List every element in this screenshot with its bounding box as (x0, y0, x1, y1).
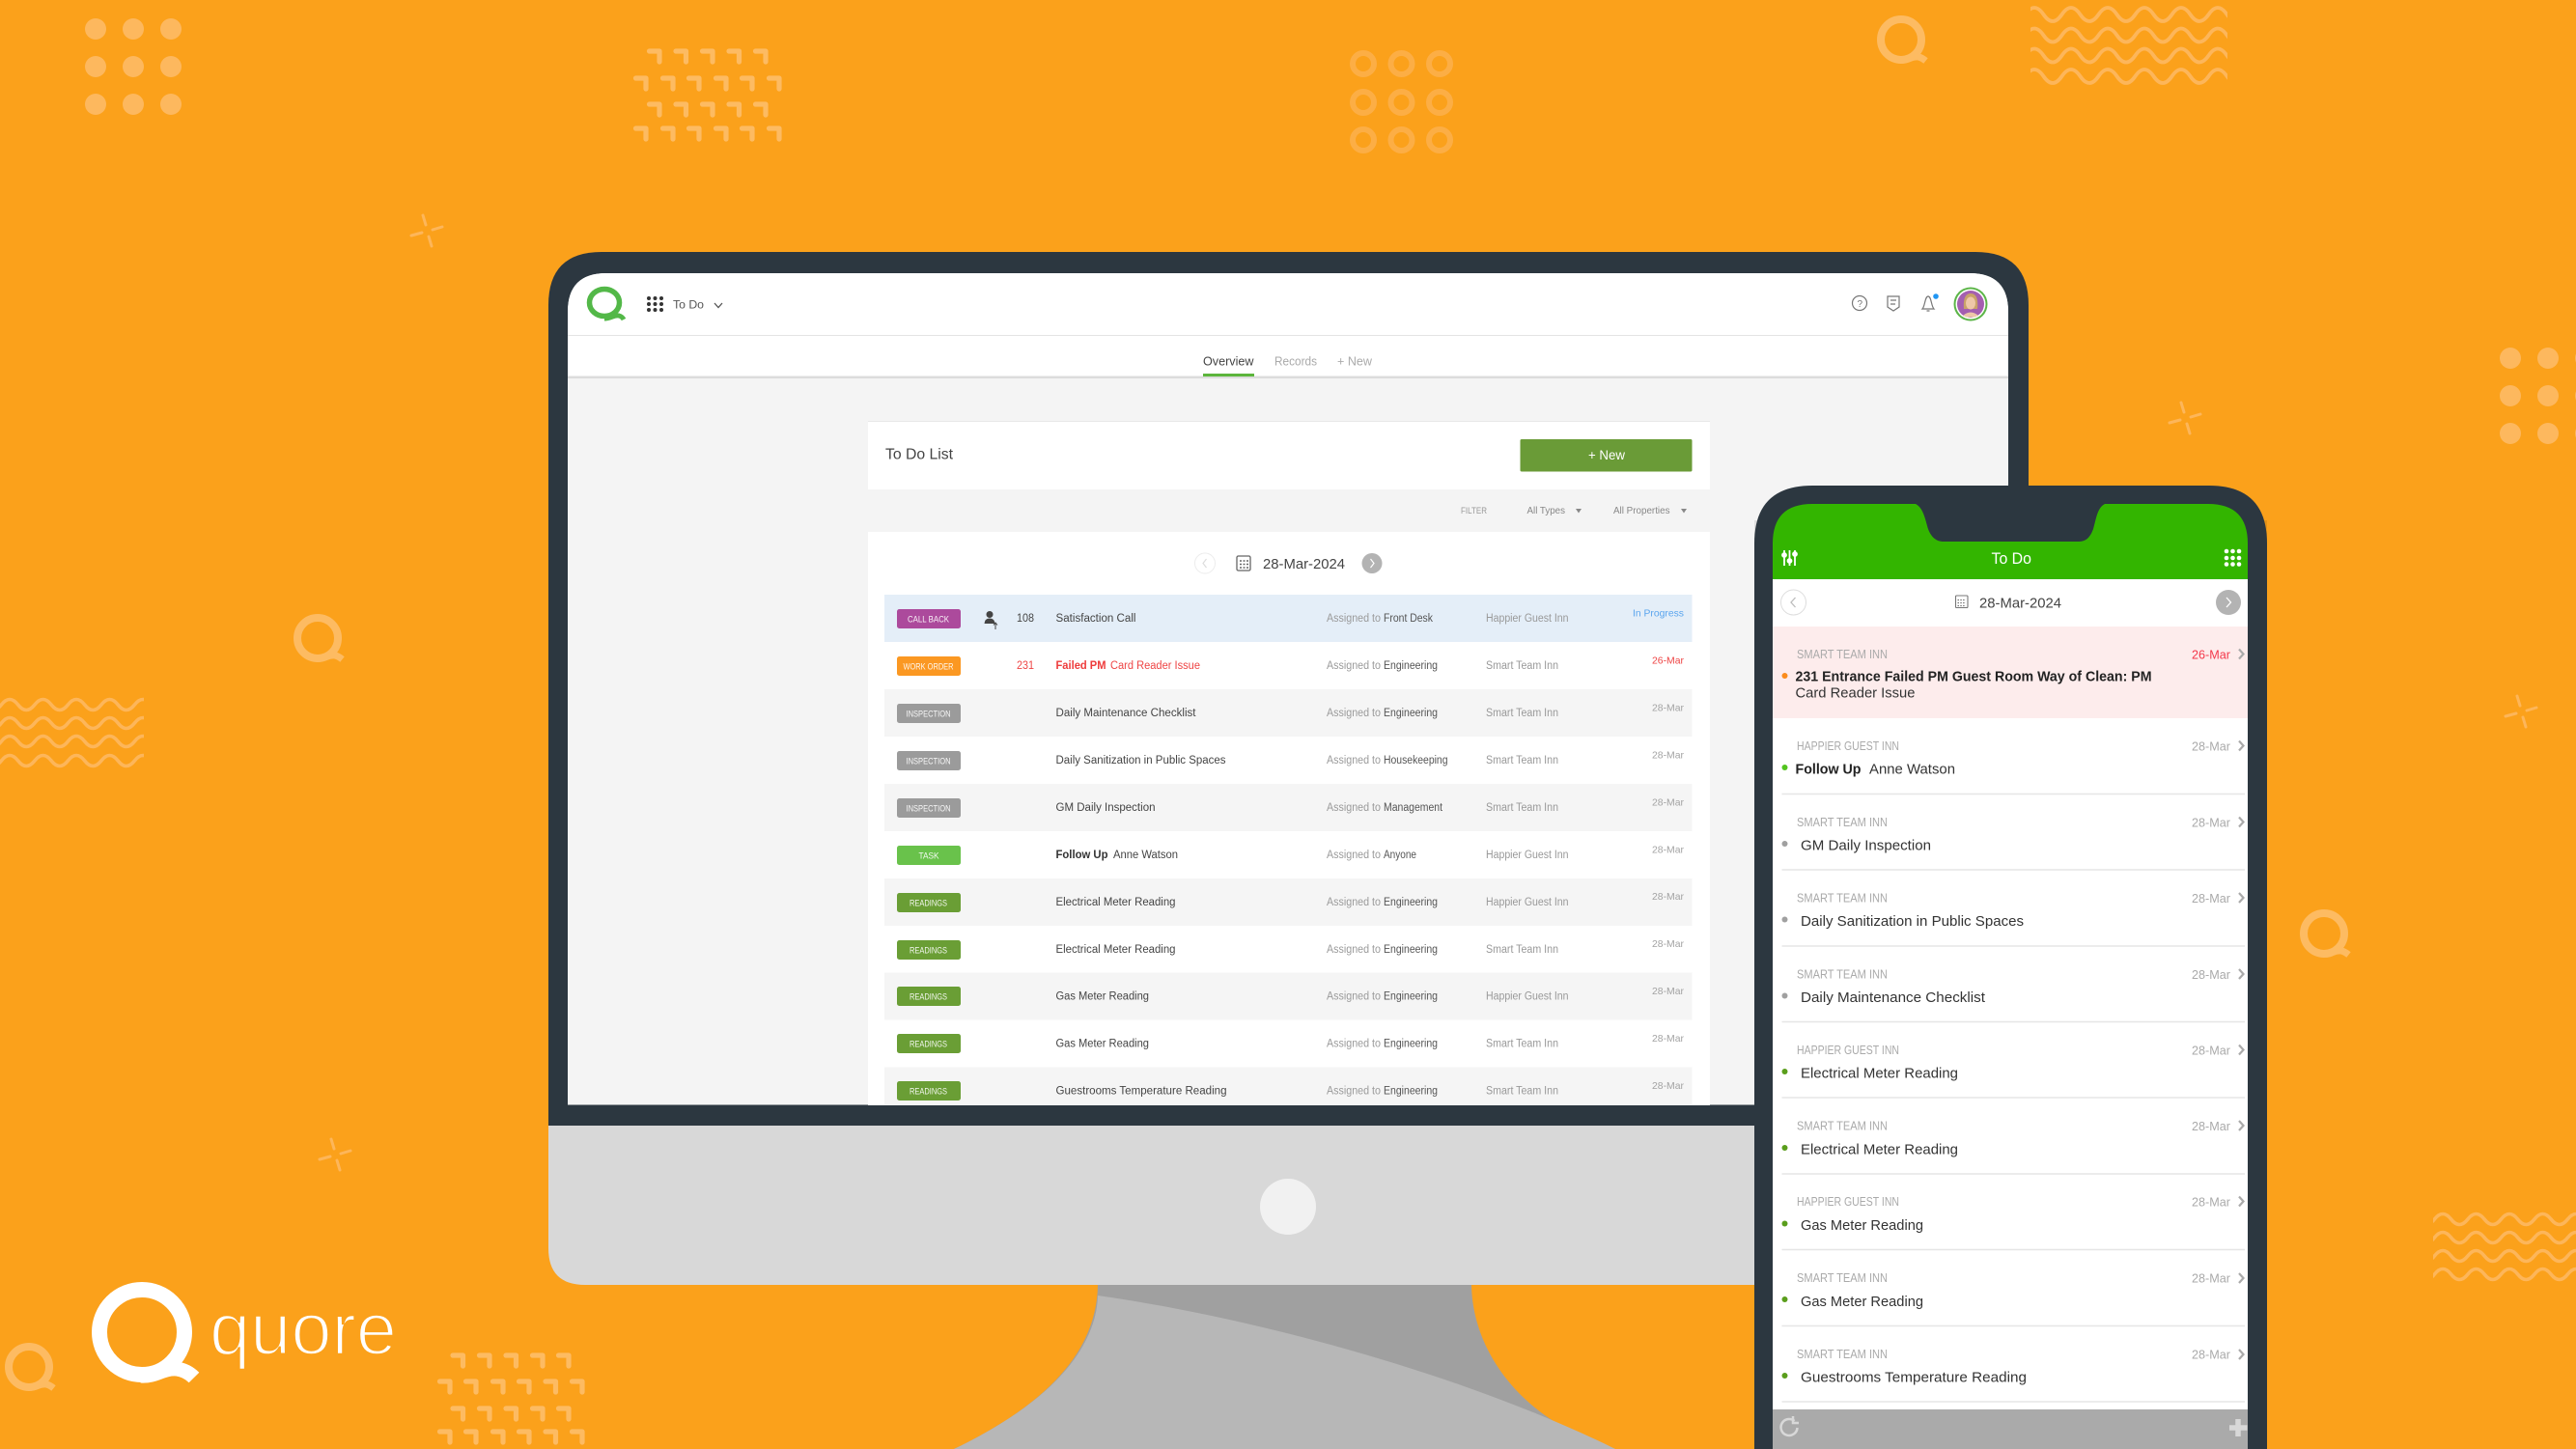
icon: menu chevron (714, 303, 722, 307)
row: Daily Maintenance Checklist (884, 689, 1692, 737)
phone screen (1773, 579, 2248, 1449)
row: Gas Meter Reading, Smart: Smart Team Inn (1486, 1039, 1558, 1050)
row: Electrical Meter Reading, Happier: Happier Guest Inn (1486, 897, 1568, 908)
filter bar: All Types (1527, 506, 1565, 516)
phone row: Electrical Meter, Smart (1782, 1120, 2245, 1174)
row: Daily Maintenance Checklist: INSPECTION (906, 709, 951, 720)
phone row: Follow Up: HAPPIER GUEST INN (1797, 739, 1899, 753)
row: Gas Meter Reading, Smart: Gas Meter Reading (1056, 1039, 1149, 1050)
new button: + New (1588, 448, 1625, 462)
icon: header Q logo (589, 290, 624, 320)
row: Follow Up Anne Watson: Anne Watson (1113, 850, 1178, 861)
icon: refresh (1781, 1416, 1799, 1435)
row: Daily Sanitization in Public Spaces: Housekeeping (1384, 755, 1448, 766)
icon: app grid (647, 296, 663, 312)
phone row: Guestrooms Temperature (1782, 1348, 2245, 1402)
phone row: Electrical Meter, Smart: 28-Mar (2192, 1120, 2230, 1133)
filter bar: All Properties (1613, 506, 1670, 516)
row: Gas Meter Reading, Happier: Engineering (1384, 990, 1438, 1002)
row: Satisfaction Call: Front Desk (1384, 613, 1433, 625)
phone row: Daily Sanitization: Daily Sanitization in Public Spaces (1801, 913, 2024, 930)
phone row: Gas Meter, Smart: SMART TEAM INN (1797, 1271, 1888, 1285)
phone row: GM Daily Inspection: SMART TEAM INN (1797, 816, 1888, 829)
icon: avatar (1954, 288, 1987, 320)
row: Guestrooms Temperature Reading: READINGS (910, 1087, 947, 1097)
row: Gas Meter Reading, Smart: 28-Mar (1652, 1033, 1684, 1045)
monitor stand (954, 1285, 1615, 1449)
phone row: Gas Meter, Happier (1782, 1195, 2245, 1249)
phone row: Electrical Meter, Happier: HAPPIER GUEST INN (1797, 1044, 1899, 1057)
phone row: Guestrooms Temperature: Guestrooms Temperature Reading (1801, 1369, 2027, 1386)
row: Electrical Meter Reading, Happier: 28-Mar (1652, 891, 1684, 903)
pattern: Q left (297, 618, 342, 659)
row: Satisfaction Call: Happier Guest Inn (1486, 613, 1568, 625)
row: Daily Sanitization in Public Spaces: 28-Mar (1652, 749, 1684, 761)
panel heading: To Do List (885, 446, 954, 463)
icon: filter sliders (1782, 550, 1797, 566)
row: GM Daily Inspection: Assigned to (1327, 802, 1381, 814)
tab: New: + New (1337, 355, 1373, 369)
app menu label: To Do (673, 297, 704, 311)
row: Guestrooms Temperature Reading: Smart Team Inn (1486, 1085, 1558, 1097)
row: Daily Sanitization in Public Spaces (897, 749, 1684, 770)
phone row: Daily Maintenance: SMART TEAM INN (1797, 967, 1888, 981)
phone row: Daily Maintenance: 28-Mar (2192, 968, 2230, 982)
phone title: To Do (1991, 549, 2031, 568)
row: Satisfaction Call: Assigned to (1327, 613, 1381, 625)
row: Gas Meter Reading, Happier: READINGS (910, 992, 947, 1002)
row: Satisfaction Call: In Progress (1633, 608, 1684, 620)
row: Daily Maintenance Checklist: Smart Team Inn (1486, 708, 1558, 719)
row: Failed PM Card Reader Issue: 231 (1017, 660, 1034, 672)
row: Follow Up Anne Watson: Assigned to (1327, 850, 1381, 861)
phone row: Guestrooms Temperature: SMART TEAM INN (1797, 1348, 1888, 1361)
phone row: GM Daily Inspection: 28-Mar (2192, 817, 2230, 830)
row: Electrical Meter Reading, Smart: Engineering (1384, 944, 1438, 956)
row: Electrical Meter Reading, Smart: Smart Team Inn (1486, 944, 1558, 956)
row: Failed PM Card Reader Issue: Engineering (1384, 660, 1438, 672)
phone row: Gas Meter, Smart: Gas Meter Reading (1801, 1294, 1923, 1310)
row: Electrical Meter Reading, Smart: Electrical Meter Reading (1056, 944, 1176, 956)
phone row: Entrance Failed PM: 26-Mar (2192, 649, 2230, 662)
phone row: Follow Up (1782, 739, 2245, 794)
row: Follow Up Anne Watson: 28-Mar (1652, 844, 1684, 855)
pattern: dots right (2500, 348, 2576, 444)
phone row: Electrical Meter, Smart: SMART TEAM INN (1797, 1120, 1888, 1133)
icon: bell (1922, 293, 1939, 311)
pattern: waves right (2418, 1214, 2576, 1280)
row: Electrical Meter Reading, Smart (897, 938, 1684, 960)
pattern: dots top left (85, 18, 182, 115)
row: Daily Maintenance Checklist: Assigned to (1327, 708, 1381, 719)
phone row: Entrance Failed PM: SMART TEAM INN (1797, 648, 1888, 661)
phone row: Gas Meter, Happier: HAPPIER GUEST INN (1797, 1195, 1899, 1209)
row: Gas Meter Reading, Smart: Engineering (1384, 1039, 1438, 1050)
row: Daily Sanitization in Public Spaces: INSPECTION (906, 757, 951, 766)
row: Daily Sanitization in Public Spaces: Assigned to (1327, 755, 1381, 766)
row: Failed PM Card Reader Issue: Failed PM (1056, 660, 1106, 672)
row: Follow Up Anne Watson: TASK (919, 851, 939, 861)
row: Gas Meter Reading, Smart: Assigned to (1327, 1039, 1381, 1050)
monitor chin (548, 1120, 2029, 1285)
row: Satisfaction Call: CALL BACK (908, 614, 950, 626)
row: GM Daily Inspection (884, 784, 1692, 831)
row: Daily Sanitization in Public Spaces: Smart Team Inn (1486, 755, 1558, 766)
app header (568, 273, 2008, 378)
panel: to do list (868, 421, 1710, 1105)
phone row: Gas Meter, Happier: Gas Meter Reading (1801, 1217, 1923, 1234)
row: Follow Up Anne Watson: Follow Up (1056, 850, 1108, 861)
row: Satisfaction Call: Satisfaction Call (1056, 613, 1135, 625)
row: Gas Meter Reading, Happier (884, 973, 1692, 1019)
phone row: Daily Sanitization (1782, 892, 2245, 946)
row: Satisfaction Call: 108 (1017, 613, 1034, 625)
phone row: Electrical Meter, Happier (1782, 1044, 2245, 1098)
icon: Q mark (99, 1290, 194, 1378)
pattern: sparkle top left (411, 215, 442, 246)
icon: comments (1888, 296, 1899, 311)
wordmark: quore (210, 1289, 397, 1371)
tab: Overview (1203, 355, 1254, 376)
row: Guestrooms Temperature Reading: Guestrooms Temperature Reading (1056, 1085, 1226, 1097)
row: Guestrooms Temperature Reading: Assigned to (1327, 1085, 1381, 1097)
row: Electrical Meter Reading, Happier: READINGS (910, 898, 947, 909)
phone row: Follow Up: Anne Watson (1869, 761, 1955, 778)
phone row: Electrical Meter, Happier: Electrical Meter Reading (1801, 1066, 1958, 1081)
phone row: Daily Maintenance: Daily Maintenance Checklist (1801, 989, 1986, 1006)
pattern: sparkle right lower (2506, 696, 2536, 727)
row: Gas Meter Reading, Happier: Assigned to (1327, 990, 1381, 1002)
phone row: Gas Meter, Smart (1782, 1271, 2245, 1326)
new button (1520, 439, 1692, 471)
row: Failed PM Card Reader Issue: Assigned to (1327, 660, 1381, 672)
row: Electrical Meter Reading, Happier: Engineering (1384, 897, 1438, 908)
row: GM Daily Inspection: Smart Team Inn (1486, 802, 1558, 814)
icon: plus (2229, 1419, 2248, 1436)
monitor bezel (548, 252, 2029, 1126)
row: Electrical Meter Reading, Smart: Assigned to (1327, 944, 1381, 956)
monitor button (1260, 1179, 1316, 1235)
icon: help (1852, 295, 1867, 311)
icon: phone grid (2225, 549, 2241, 567)
row: Gas Meter Reading, Smart (897, 1033, 1684, 1053)
row: Gas Meter Reading, Happier: Happier Guest Inn (1486, 990, 1568, 1002)
row: Electrical Meter Reading, Smart: READINGS (910, 946, 947, 956)
row: GM Daily Inspection: GM Daily Inspection (1056, 802, 1155, 814)
row: Follow Up Anne Watson (897, 844, 1684, 865)
row: Gas Meter Reading, Happier: Gas Meter Reading (1056, 990, 1149, 1002)
phone date navigator (1780, 590, 2241, 615)
pattern: rings top (1353, 53, 1450, 151)
logo: quore (99, 1289, 397, 1378)
row: Electrical Meter Reading, Smart: 28-Mar (1652, 938, 1684, 950)
row: Daily Maintenance Checklist: Daily Maintenance Checklist (1056, 708, 1196, 719)
row: Satisfaction Call (884, 595, 1692, 642)
phone row: Entrance Failed PM (1773, 627, 2248, 718)
row: Electrical Meter Reading, Happier: Assigned to (1327, 897, 1381, 908)
row: GM Daily Inspection: Management (1384, 802, 1443, 814)
phone row: Follow Up: Follow Up (1796, 761, 1862, 778)
phone row: Gas Meter, Happier: 28-Mar (2192, 1195, 2230, 1209)
phone bottom bar (1773, 1409, 2248, 1449)
row: Guestrooms Temperature Reading: 28-Mar (1652, 1080, 1684, 1092)
phone row: Entrance Failed PM: 231 Entrance Failed PM Guest Room Way of Clean: PM (1796, 668, 2151, 685)
pattern: ticks top (635, 51, 779, 139)
row: GM Daily Inspection: INSPECTION (906, 803, 951, 815)
row: Failed PM Card Reader Issue: WORK ORDER (904, 662, 954, 672)
row: Gas Meter Reading, Smart: READINGS (910, 1039, 947, 1050)
row: Gas Meter Reading, Happier: 28-Mar (1652, 986, 1684, 997)
phone row: Daily Sanitization: 28-Mar (2192, 892, 2230, 906)
row: Failed PM Card Reader Issue: Smart Team Inn (1486, 660, 1558, 672)
row: Follow Up Anne Watson: Happier Guest Inn (1486, 850, 1568, 861)
filter bar (868, 489, 1710, 532)
pattern: ticks bottom left (440, 1355, 582, 1442)
date navigator: 28-Mar-2024 (1263, 556, 1345, 572)
pattern: sparkle left lower (320, 1139, 350, 1170)
phone row: Daily Sanitization: SMART TEAM INN (1797, 892, 1888, 906)
monitor screen (568, 273, 2008, 1105)
pattern: Q top right (1881, 19, 1925, 61)
phone row: Gas Meter, Smart: 28-Mar (2192, 1272, 2230, 1286)
pattern: Q bottom left (9, 1347, 54, 1388)
phone row: GM Daily Inspection (1782, 816, 2245, 870)
tab: Overview: Overview (1203, 355, 1254, 369)
phone row: Electrical Meter, Happier: 28-Mar (2192, 1045, 2230, 1058)
phone body (1754, 486, 2267, 1449)
row: Failed PM Card Reader Issue (897, 655, 1684, 676)
row: Guestrooms Temperature Reading (884, 1068, 1692, 1104)
row: Daily Sanitization in Public Spaces: Daily Sanitization in Public Spaces (1056, 755, 1226, 766)
row: Follow Up Anne Watson: Anyone (1384, 850, 1416, 861)
phone row: Follow Up: 28-Mar (2192, 739, 2230, 753)
row: Daily Maintenance Checklist: 28-Mar (1652, 703, 1684, 714)
row: Failed PM Card Reader Issue: 26-Mar (1652, 655, 1684, 666)
row: GM Daily Inspection: 28-Mar (1652, 797, 1684, 809)
row: Daily Maintenance Checklist: Engineering (1384, 708, 1438, 719)
tab: Records: Records (1274, 355, 1317, 369)
pattern: waves top right (2030, 6, 2227, 85)
phone row: Electrical Meter, Smart: Electrical Meter Reading (1801, 1141, 1958, 1158)
phone row: Entrance Failed PM: Card Reader Issue (1796, 685, 1916, 701)
date navigator (1195, 553, 1383, 573)
phone row: GM Daily Inspection: GM Daily Inspection (1801, 838, 1931, 853)
pattern: Q right (2304, 913, 2348, 955)
pattern: waves left (0, 699, 168, 766)
row: Guestrooms Temperature Reading: Engineering (1384, 1085, 1438, 1097)
pattern: sparkle right upper (2170, 403, 2200, 433)
icon: help: ? (1858, 299, 1863, 310)
row: Electrical Meter Reading, Happier (884, 878, 1692, 926)
filter bar: FILTER (1461, 506, 1487, 516)
phone (1754, 486, 2267, 1449)
row: Failed PM Card Reader Issue: Card Reader Issue (1110, 660, 1200, 672)
row: Electrical Meter Reading, Happier: Electrical Meter Reading (1056, 897, 1176, 908)
phone date navigator: 28-Mar-2024 (1979, 595, 2061, 612)
phone row: Guestrooms Temperature: 28-Mar (2192, 1348, 2230, 1361)
phone row: Daily Maintenance (1782, 967, 2245, 1021)
phone header (1773, 504, 2248, 579)
